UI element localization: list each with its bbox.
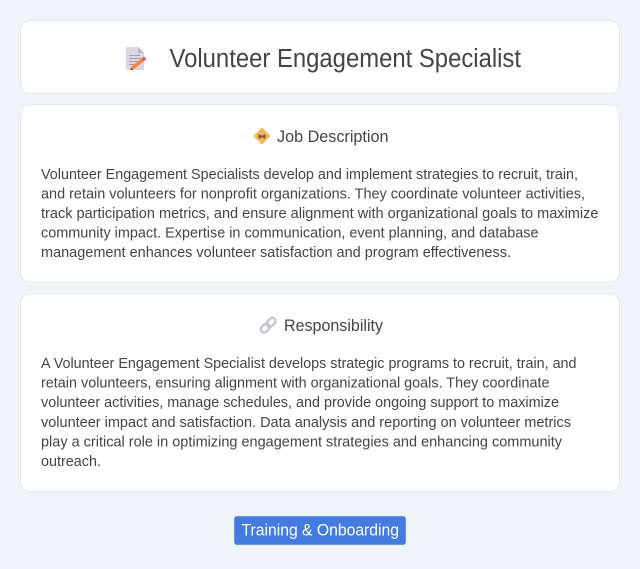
responsibility text: outreach. <box>41 454 101 470</box>
icon: link <box>260 317 277 334</box>
button: training and onboarding <box>234 516 406 545</box>
job description text <box>41 167 598 261</box>
icon: document with pencil <box>126 47 146 70</box>
heading: responsibility: Responsibility <box>284 317 384 335</box>
panel: job description <box>20 104 620 282</box>
button: training and onboarding: Training & Onboarding <box>242 522 399 540</box>
job description text: and retain volunteers for nonprofit organizations. They coordinate volunteer activities, <box>41 186 585 202</box>
responsibility text <box>41 356 576 470</box>
job description text: track participation metrics, and ensure alignment with organizational goals to maximize <box>41 206 598 222</box>
job description text: community impact. Expertise in communication, event planning, and database <box>41 226 538 242</box>
job description text: Volunteer Engagement Specialists develop and implement strategies to recruit, train, <box>41 167 578 183</box>
panel: title header <box>20 20 620 94</box>
responsibility text: retain volunteers, ensuring alignment with organizational goals. They coordinate <box>41 376 550 392</box>
job description text: management enhances volunteer satisfaction and program effectiveness. <box>41 245 511 261</box>
heading: job description: Job Description <box>277 128 388 146</box>
responsibility text: A Volunteer Engagement Specialist develops strategic programs to recruit, train, and <box>41 356 576 372</box>
responsibility text: play a critical role in optimizing engagement strategies and enhancing community <box>41 434 563 450</box>
title: Volunteer Engagement Specialist <box>170 45 521 73</box>
responsibility text: volunteer impact and satisfaction. Data analysis and reporting on volunteer metrics <box>41 415 571 431</box>
panel: responsibility <box>20 294 620 492</box>
icon: diamond sign <box>254 128 270 144</box>
responsibility text: volunteer activities, manage schedules, and provide ongoing support to maximize <box>41 395 559 411</box>
